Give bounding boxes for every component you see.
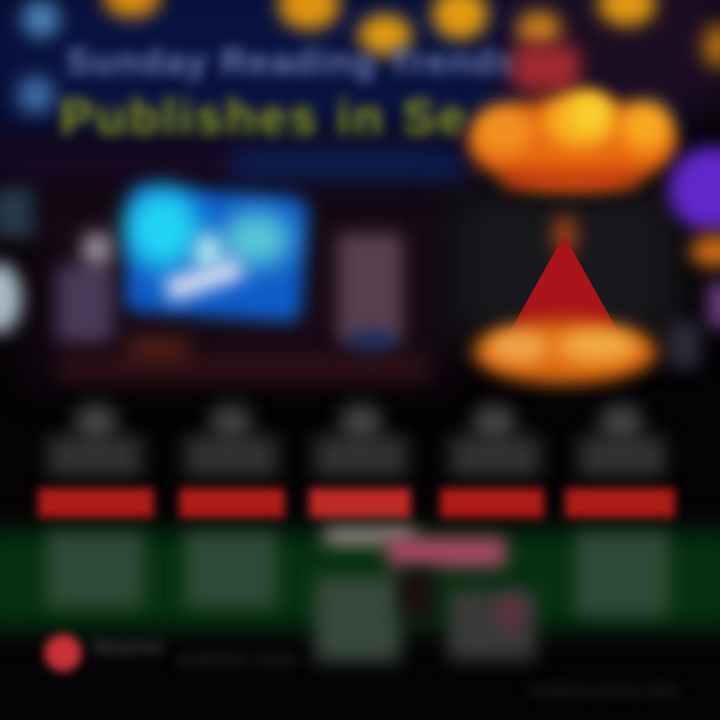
strip: maroon row under figures bbox=[60, 352, 430, 382]
background: green lower band bbox=[0, 530, 720, 630]
illustration: right pillar figure bbox=[327, 223, 413, 360]
icon: blue circle top bbox=[22, 0, 60, 38]
title: first line: Sunday Reading Trends bbox=[66, 41, 519, 82]
icon: red lantern cap bbox=[512, 44, 580, 92]
illustration: left pillar figure bbox=[46, 220, 124, 350]
card 2 bbox=[172, 396, 292, 615]
illustration: white shape at left edge bbox=[0, 262, 22, 334]
background: header right dark bbox=[500, 0, 720, 110]
illustration: orange lantern base bbox=[460, 308, 670, 398]
card 5 bbox=[558, 396, 682, 623]
illustration: large orange lantern bbox=[455, 78, 690, 204]
illustration: orange orb bbox=[690, 234, 720, 268]
strip: brown accent under screen bbox=[128, 335, 188, 363]
illustration: purple orb bbox=[668, 146, 720, 232]
illustration: pink ribbon across cards bbox=[312, 515, 530, 634]
illustration: red tent stem bbox=[510, 205, 618, 332]
icon: red logo bbox=[44, 634, 82, 672]
icon: blue circle lower bbox=[17, 76, 55, 114]
illustration: grey figure right bbox=[668, 322, 700, 368]
card 4 bbox=[432, 396, 552, 668]
footer: caption text: publisher notes bbox=[178, 651, 297, 668]
footer: credit text: reading survey data bbox=[528, 682, 679, 699]
lanterns: orange circles across top bbox=[90, 0, 720, 79]
illustration: edge pink-blue accent bbox=[708, 282, 720, 328]
background: purple band bbox=[0, 138, 490, 188]
card 3 bbox=[301, 396, 419, 672]
illustration: left edge grey block bbox=[0, 188, 34, 238]
illustration: blue screen bbox=[106, 168, 322, 336]
footer: brand text: Source bbox=[92, 636, 163, 659]
title: second line: Publishes in Se bbox=[60, 89, 469, 145]
background: dark maroon middle bbox=[30, 190, 450, 380]
card 1 bbox=[30, 396, 162, 615]
background: tent backdrop bbox=[450, 190, 680, 340]
background: navy header bbox=[0, 0, 680, 140]
background: blue glow under title bbox=[230, 150, 460, 184]
